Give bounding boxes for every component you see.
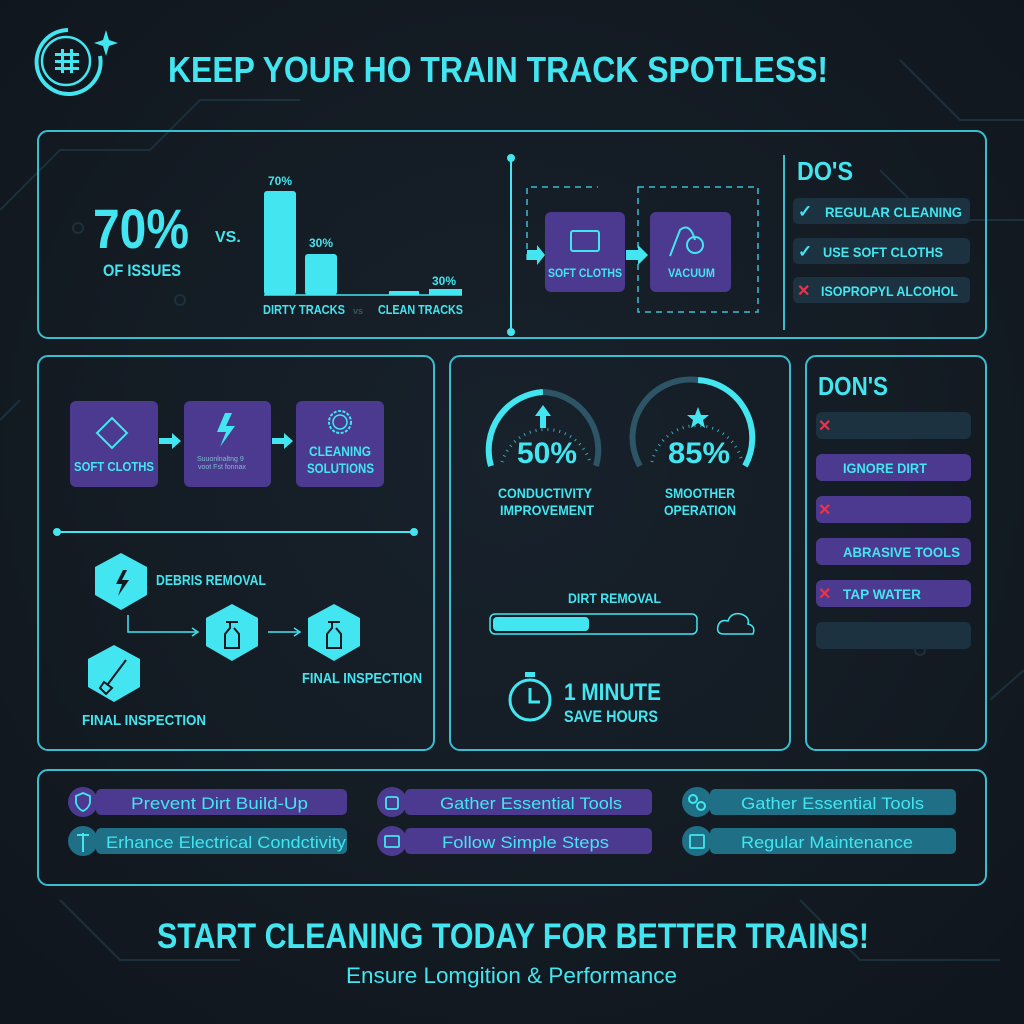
- panel: don'ts: ✕: [818, 502, 831, 519]
- process: soft cloths to vacuum: VACUUM: [668, 266, 715, 280]
- hex: brush: FINAL INSPECTION: [82, 712, 206, 729]
- panel: results: [450, 356, 790, 750]
- list: do's: ISOPROPYL ALCOHOL: [821, 283, 958, 299]
- gauge: 50% conductivity: [489, 392, 598, 518]
- gauge: 85% smoother: OPERATION: [664, 502, 736, 518]
- process: soft cloths to vacuum: [527, 187, 758, 312]
- gauge: 85% smoother: 85%: [668, 437, 730, 470]
- step box: soft cloths: [70, 401, 158, 487]
- stat: 70% of issues: [93, 197, 241, 280]
- panel: cleaning steps: [38, 356, 434, 750]
- panel: top overview: [38, 131, 986, 338]
- timeline line: [507, 154, 515, 336]
- gauge: 85% smoother: [633, 380, 752, 518]
- gauge: 50% conductivity: 50%: [517, 437, 577, 470]
- hex: spray 1: [206, 604, 258, 661]
- panel: benefits pills: Gather Essential Tools: [741, 794, 924, 813]
- stat: 70% of issues: VS.: [215, 229, 241, 246]
- bar chart: dirty vs clean: [263, 174, 463, 317]
- list: do's: ✓: [798, 242, 812, 261]
- panel: benefits pills: Gather Essential Tools: [440, 794, 622, 813]
- panel: don'ts: ABRASIVE TOOLS: [843, 544, 960, 560]
- step box: soft cloths: SOFT CLOTHS: [74, 459, 154, 474]
- hex: spray 2: FINAL INSPECTION: [302, 670, 422, 687]
- gauge: 85% smoother: SMOOTHER: [665, 485, 735, 501]
- bar chart: dirty vs clean: 30%: [432, 274, 456, 288]
- stopwatch: 1 minute: [510, 672, 661, 726]
- stopwatch: 1 minute: SAVE HOURS: [564, 707, 658, 726]
- title: KEEP YOUR HO TRAIN TRACK SPOTLESS!: [168, 49, 828, 90]
- bar chart: dirty vs clean: 70%: [268, 174, 292, 188]
- gauge: 50% conductivity: CONDUCTIVITY: [498, 485, 593, 501]
- bar chart: dirty vs clean: 30%: [309, 236, 333, 250]
- step box: electricity: Suuonlnaltng 9: [197, 456, 244, 463]
- panel: benefits pills: [38, 770, 986, 885]
- panel: benefits pills: Regular Maintenance: [741, 833, 913, 852]
- list: do's: DO'S: [797, 156, 853, 186]
- panel: don'ts: [806, 356, 986, 750]
- panel: benefits pills: Prevent Dirt Build-Up: [131, 794, 308, 813]
- list: do's: ✓: [798, 202, 812, 221]
- panel: benefits pills: Erhance Electrical Condctivity: [106, 833, 347, 852]
- footer subtitle: Ensure Lomgition & Performance: [346, 963, 677, 988]
- panel: don'ts: ✕: [818, 418, 831, 435]
- progress bar: dirt removal: DIRT REMOVAL: [568, 590, 661, 606]
- step box: cleaning solutions: SOLUTIONS: [307, 460, 374, 476]
- step box: cleaning solutions: [296, 401, 384, 487]
- bar chart: dirty vs clean: CLEAN TRACKS: [378, 302, 463, 317]
- arrow: [159, 433, 181, 449]
- arrow: [272, 433, 293, 449]
- list: do's: [793, 156, 970, 303]
- hex: spray 2: [302, 604, 422, 687]
- stat: 70% of issues: OF ISSUES: [103, 261, 181, 280]
- hex: debris removal: DEBRIS REMOVAL: [156, 572, 266, 589]
- panel: don'ts: IGNORE DIRT: [843, 460, 927, 476]
- logo icon: train track: [37, 30, 118, 94]
- hex: debris removal: [95, 553, 266, 610]
- footer heading: START CLEANING TODAY FOR BETTER TRAINS!: [157, 917, 869, 956]
- list: do's: REGULAR CLEANING: [825, 204, 962, 220]
- gauge: 50% conductivity: IMPROVEMENT: [500, 502, 594, 518]
- process: soft cloths to vacuum: SOFT CLOTHS: [548, 266, 622, 280]
- step box: electricity: [184, 401, 271, 487]
- bar chart: dirty vs clean: DIRTY TRACKS: [263, 302, 345, 317]
- panel: don'ts: TAP WATER: [843, 586, 921, 602]
- panel: don'ts: ✕: [818, 586, 831, 603]
- stat: 70% of issues: 70%: [93, 197, 189, 260]
- panel: benefits pills: Follow Simple Steps: [442, 833, 609, 852]
- bar chart: dirty vs clean: vs: [353, 306, 363, 316]
- progress bar: dirt removal: [490, 590, 754, 634]
- stopwatch: 1 minute: 1 MINUTE: [564, 679, 661, 706]
- panel: don'ts: DON'S: [818, 371, 888, 401]
- hex flow: [82, 553, 422, 729]
- step box: cleaning solutions: CLEANING: [309, 443, 371, 459]
- hex: brush: [82, 645, 206, 729]
- step box: electricity: voot Fst fonnax: [198, 464, 246, 471]
- list: do's: ✕: [797, 283, 810, 300]
- list: do's: USE SOFT CLOTHS: [823, 244, 943, 260]
